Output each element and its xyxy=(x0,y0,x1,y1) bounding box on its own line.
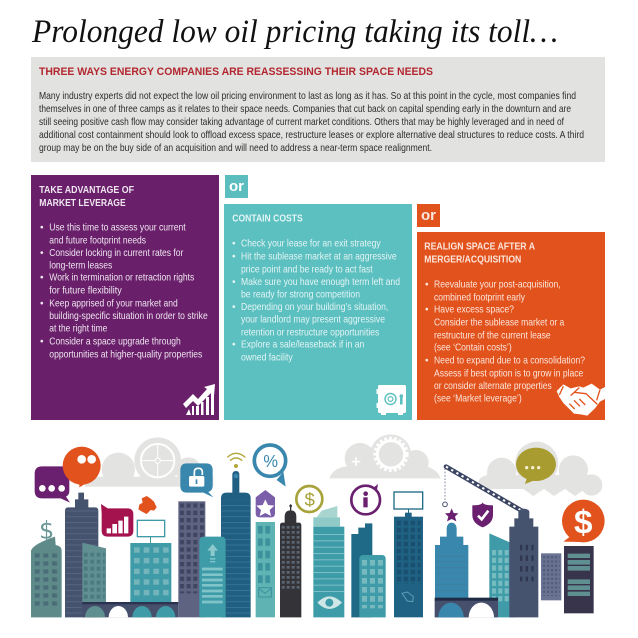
bullet list: contain costs: • xyxy=(232,302,236,313)
icon: orange dollar bubble xyxy=(562,500,605,542)
icon: signal bars bubble xyxy=(101,504,133,537)
building: grey-green tower xyxy=(31,537,62,617)
bullet list: market leverage: and future footprint needs xyxy=(49,235,146,246)
building: skewed teal xyxy=(489,533,516,617)
bullet list: realign space: Assess if best option is to grow in place xyxy=(434,369,584,380)
cloud with gear xyxy=(329,434,441,478)
icon: handshake xyxy=(557,384,605,416)
panel heading: market leverage: MARKET LEVERAGE xyxy=(39,198,126,209)
panel heading: contain costs: CONTAIN COSTS xyxy=(232,214,303,224)
bullet list: realign space: restructure of the current lease xyxy=(434,330,551,341)
icon: orange puzzle splat xyxy=(138,496,157,514)
bullet list: market leverage: Consider a space upgrade through xyxy=(49,336,181,347)
bullet list: market leverage: • xyxy=(40,248,44,259)
building: tall blue tower with spire xyxy=(221,471,251,617)
icon: info ring xyxy=(351,484,380,514)
bullet list: realign space xyxy=(425,280,585,405)
bullet list: realign space: • xyxy=(425,356,429,367)
icon: star xyxy=(445,508,458,521)
icon: orange speech bubble xyxy=(63,447,101,487)
bullet list: market leverage: Keep apprised of your market and xyxy=(49,299,178,310)
building: blue with billboard xyxy=(394,492,423,617)
bullet list: contain costs: be ready for strong competition xyxy=(241,290,360,301)
bullet list: realign space: (see ‘Contain costs’) xyxy=(434,343,512,354)
intro paragraph: group may be on the buy side of an acquisition and will need to address a near-term space realignment. xyxy=(39,143,432,154)
icon: percent bubble: % xyxy=(263,451,278,471)
bullet list: contain costs: • xyxy=(232,277,236,288)
skyline illustration: right half xyxy=(313,434,605,617)
bullet list: contain costs: • xyxy=(232,239,236,250)
building: grey windowed tower xyxy=(178,501,205,617)
panel heading: realign space xyxy=(424,242,535,266)
bullet list: realign space: Have excess space? xyxy=(434,305,514,316)
bullet list: market leverage: • xyxy=(40,336,44,347)
bullet list: contain costs: price point and be ready to act fast xyxy=(241,265,373,276)
icon: wifi signal xyxy=(227,453,245,467)
icon: dollar coin xyxy=(296,486,322,512)
bullet list: realign space: combined footprint early xyxy=(434,293,526,304)
icon: dollar sign: $ xyxy=(39,516,54,544)
cloud with wheel xyxy=(85,437,213,487)
building: dark block with bars xyxy=(564,546,594,613)
bullet list: market leverage: Use this time to assess your current xyxy=(49,223,186,234)
bullet list: contain costs: owned facility xyxy=(241,353,293,364)
icon: shield with check xyxy=(472,502,493,527)
teal building with eye xyxy=(313,506,344,617)
label: or (second) xyxy=(417,204,440,227)
bullet list: contain costs: Depending on your building’s situation, xyxy=(241,302,388,313)
bullet list: contain costs xyxy=(232,239,400,364)
icon: olive speech bubble xyxy=(516,448,556,484)
building: slate tower under crane xyxy=(509,509,538,617)
building: small grey xyxy=(541,553,561,600)
bullet list: contain costs: Hit the sublease market at an aggressive xyxy=(241,251,397,262)
building: light teal with envelope xyxy=(256,522,275,617)
building: rounded teal xyxy=(359,555,386,617)
intro heading: THREE WAYS ENERGY COMPANIES ARE REASSESSING THEIR SPACE NEEDS xyxy=(39,66,433,78)
bullet list: market leverage: at the right time xyxy=(49,324,108,335)
bullet list: contain costs: • xyxy=(232,340,236,351)
bullet list: market leverage: Consider locking in current rates for xyxy=(49,248,184,259)
building: stepped dark teal xyxy=(351,523,372,617)
panel: market leverage xyxy=(31,175,219,420)
bullet list: market leverage: long-term leases xyxy=(49,261,112,272)
bullet list: contain costs: Check your lease for an exit strategy xyxy=(241,239,381,250)
panel heading: market leverage xyxy=(39,185,134,209)
bullet list: realign space: • xyxy=(425,305,429,316)
bullet list: contain costs: Make sure you have enough term left and xyxy=(241,277,400,288)
icon: unlocked padlock bubble xyxy=(180,463,213,497)
cloud with scalloped edge xyxy=(478,442,602,496)
bullet list: realign space: • xyxy=(425,280,429,291)
bullet list: realign space: Reevaluate your post-acquisition, xyxy=(434,280,561,291)
bullet list: realign space: (see ‘Market leverage’) xyxy=(434,394,522,405)
bullet list: market leverage: opportunities at higher-quality properties xyxy=(49,349,202,360)
icon: purple speech bubble xyxy=(35,466,70,503)
building: teal front with arrow xyxy=(199,537,226,617)
icon: orange dollar bubble: $ xyxy=(574,504,593,541)
building: grey-green front xyxy=(82,543,106,603)
bullet list: contain costs: retention or restructure opportunities xyxy=(241,328,379,339)
bullet list: market leverage: Work in termination or retraction rights xyxy=(49,273,194,284)
panel heading: realign space: MERGER/ACQUISITION xyxy=(424,254,521,266)
icon: safe xyxy=(376,385,406,415)
bullet list: market leverage: • xyxy=(40,299,44,310)
icon: rising chart xyxy=(183,384,215,415)
bullet list: market leverage: • xyxy=(40,273,44,284)
bullet list: realign space: or consider alternate properties xyxy=(434,381,552,392)
bridge xyxy=(82,602,178,617)
bullet list: realign space: Consider the sublease market or a xyxy=(434,318,565,329)
panel: introduction xyxy=(31,57,605,162)
bullet list: market leverage xyxy=(40,223,208,360)
bullet list: contain costs: • xyxy=(232,251,236,262)
bullet list: contain costs: your landlord may present aggressive xyxy=(241,315,385,326)
panel heading: realign space: REALIGN SPACE AFTER A xyxy=(424,242,535,252)
panel: contain costs xyxy=(224,204,412,420)
billboard on teal building xyxy=(130,520,171,603)
title: Prolonged low oil pricing taking its toll… xyxy=(31,14,558,50)
bridge xyxy=(435,598,498,617)
icon: dollar coin: $ xyxy=(304,489,315,510)
bullet list: market leverage: for future flexibility xyxy=(49,285,122,296)
bullet list: market leverage: building-specific situation in order to strike xyxy=(49,311,208,322)
icon: star price tag xyxy=(256,490,275,517)
icon: percent bubble xyxy=(254,445,286,487)
intro paragraph xyxy=(39,91,584,154)
building: slate tower xyxy=(65,493,98,617)
bullet list: realign space: Need to expand due to a consolidation? xyxy=(434,356,585,367)
building: black domed tower xyxy=(280,504,301,617)
label: or (second): or xyxy=(421,207,436,224)
label: or (first) xyxy=(225,175,248,198)
bullet list: contain costs: Explore a sale/leaseback if in an xyxy=(241,340,364,351)
label: or (first): or xyxy=(229,178,244,195)
panel: realign space xyxy=(417,232,605,420)
bullet list: market leverage: • xyxy=(40,223,44,234)
building: stepped blue xyxy=(435,523,468,617)
icon: crane arm xyxy=(443,467,523,512)
skyline illustration: left half xyxy=(31,437,322,617)
panel heading: market leverage: TAKE ADVANTAGE OF xyxy=(39,185,134,196)
